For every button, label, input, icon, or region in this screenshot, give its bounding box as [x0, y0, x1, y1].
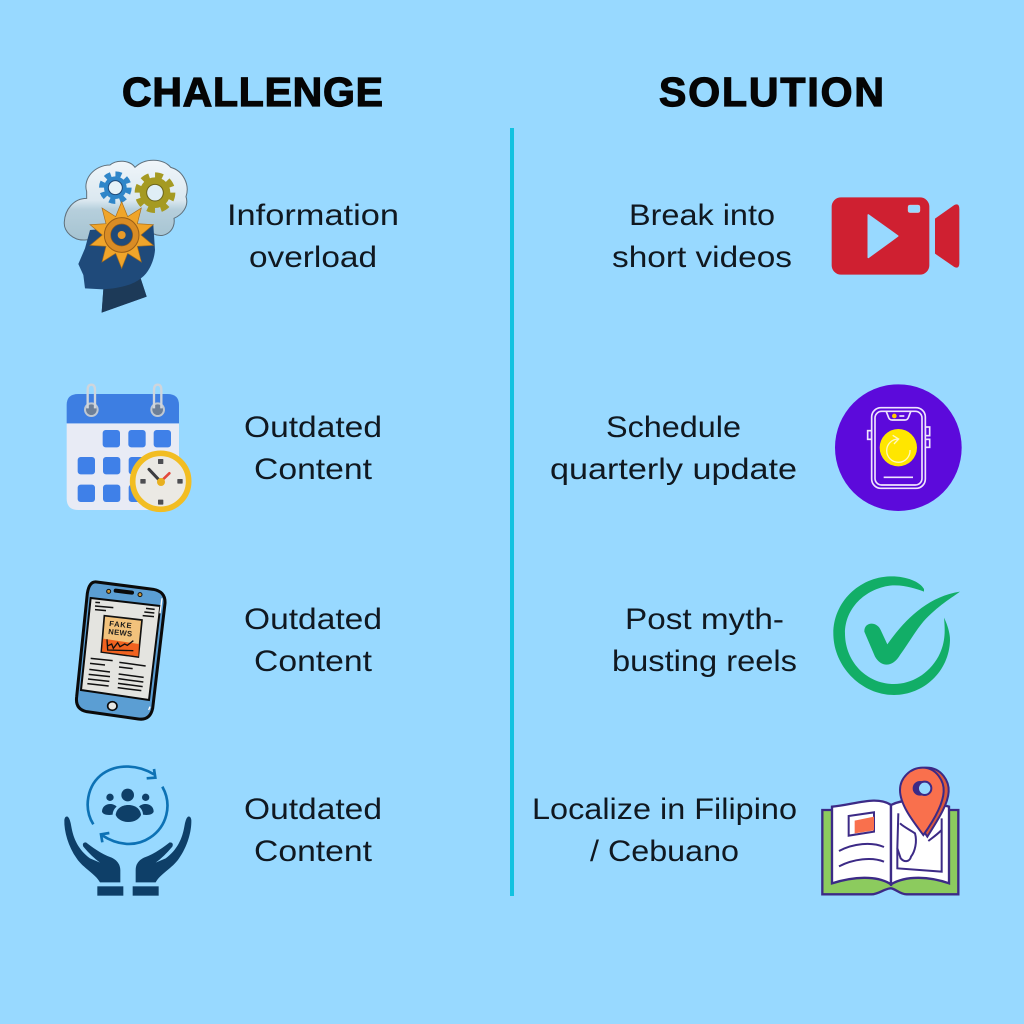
- text: schedule quarterly update: Schedule: [606, 411, 741, 444]
- text: outdated content row three: Content: [254, 645, 373, 678]
- text: schedule quarterly update: [550, 411, 797, 486]
- text: break into short videos: short videos: [612, 241, 792, 274]
- text: outdated content row two: Outdated: [244, 411, 382, 444]
- text: outdated content row four: Content: [254, 835, 373, 868]
- text: post myth-busting reels: [612, 603, 797, 678]
- text: outdated content row four: [244, 793, 382, 868]
- icon: calendar with clock: [67, 385, 189, 510]
- icon: head with gears: [64, 160, 187, 313]
- text: post myth-busting reels: Post myth-: [625, 603, 784, 636]
- text: outdated content row four: Outdated: [244, 793, 382, 826]
- heading: challenge: CHALLENGE: [122, 69, 383, 115]
- center divider: [510, 128, 514, 896]
- icon: fake news phone: [76, 582, 165, 719]
- text: outdated content row three: Outdated: [244, 603, 382, 636]
- text: localize in filipino or cebuano: Localize in Filipino: [532, 793, 797, 826]
- icon: fake news phone: NEWS: [108, 627, 133, 639]
- text: post myth-busting reels: busting reels: [612, 645, 797, 678]
- text: schedule quarterly update: quarterly update: [550, 453, 797, 486]
- icon: map book with pin: [822, 768, 958, 894]
- text: outdated content row two: [244, 411, 382, 486]
- text: information overload: Information: [227, 199, 399, 232]
- icon: people in caring hands: [64, 767, 191, 896]
- text: localize in filipino or cebuano: / Cebuano: [590, 835, 739, 868]
- text: outdated content row three: [244, 603, 382, 678]
- icon: green check mark: [833, 576, 960, 695]
- text: break into short videos: [612, 199, 792, 274]
- text: information overload: overload: [249, 241, 377, 274]
- icon: phone with refresh: [835, 384, 962, 511]
- text: information overload: [227, 199, 399, 274]
- icon: fake news phone: FAKE: [109, 619, 133, 630]
- icon: video camera: [832, 197, 959, 275]
- text: outdated content row two: Content: [254, 453, 373, 486]
- heading: solution: SOLUTION: [659, 69, 884, 115]
- text: localize in filipino or cebuano: [532, 793, 797, 868]
- text: break into short videos: Break into: [629, 199, 775, 232]
